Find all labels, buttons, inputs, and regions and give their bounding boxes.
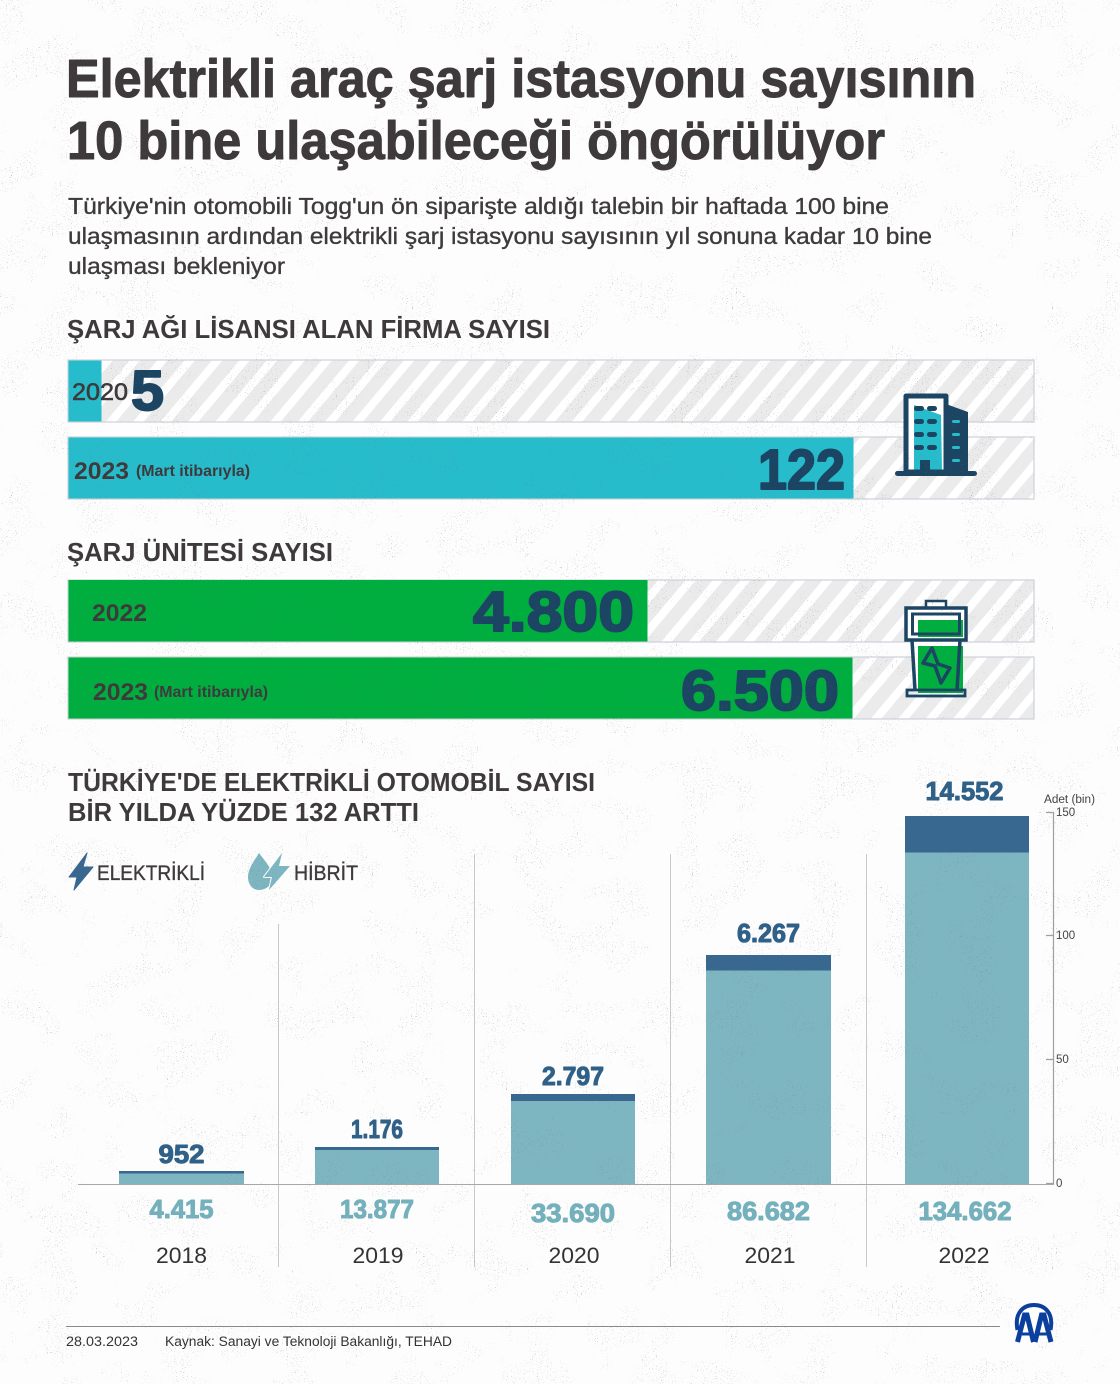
- 2020 column: 2.797: [542, 1061, 604, 1091]
- 2020 column: [511, 1061, 635, 1268]
- bar: 2023 licences: (Mart itibarıyla): [136, 463, 250, 480]
- title: [66, 49, 976, 171]
- 2022 column: 2022: [938, 1243, 990, 1268]
- title: Elektrikli araç şarj istasyonu sayısının: [66, 49, 976, 109]
- axis: [1044, 794, 1095, 1190]
- icon: charging station: [906, 601, 966, 696]
- bar: 2023 units: [68, 657, 1034, 723]
- source line: 28.03.2023: [66, 1334, 138, 1349]
- 2021 column: [706, 918, 831, 1268]
- bar: 2020 licences: 5: [131, 359, 164, 423]
- 2019 column: [315, 1114, 439, 1268]
- bar chart: [78, 776, 1095, 1268]
- column dividers: [278, 854, 866, 1267]
- 2020 column: 2020: [548, 1243, 600, 1268]
- 2022 column: 134.662: [918, 1196, 1012, 1226]
- 2018 column: 2018: [156, 1243, 207, 1268]
- axis: 50: [1056, 1054, 1069, 1066]
- 2019 column: 2019: [352, 1243, 404, 1268]
- 2022 column: 14.552: [926, 776, 1004, 806]
- 2020 column: 33.690: [531, 1198, 615, 1228]
- bar: 2023 units: 6.500: [681, 659, 839, 723]
- 2018 column: [119, 1139, 244, 1268]
- intro text: [68, 193, 932, 279]
- title: 10 bine ulaşabileceği öngörülüyor: [67, 111, 885, 171]
- bar: 2023 licences: 2023: [74, 458, 129, 485]
- 2021 column: 2021: [744, 1243, 796, 1268]
- legend label: hybrid: HİBRİT: [294, 862, 358, 885]
- legend: [69, 853, 358, 890]
- bar: 2023 units: 2023: [93, 679, 148, 706]
- icon: electric: [69, 853, 93, 890]
- bar: 2023 licences: [68, 437, 1034, 502]
- 2018 column: 4.415: [150, 1194, 214, 1224]
- bar: 2022 units: 4.800: [473, 580, 634, 644]
- panel: licence bars: [68, 359, 1034, 502]
- axis: 0: [1056, 1178, 1062, 1190]
- heading: EV count: BİR YILDA YÜZDE 132 ARTTI: [68, 797, 419, 827]
- panel: charging unit bars: [68, 580, 1034, 723]
- heading: licence count: ŞARJ AĞI LİSANSI ALAN FİRMA SAYISI: [67, 314, 550, 344]
- 2019 column: 13.877: [340, 1194, 414, 1224]
- 2021 column: 6.267: [737, 918, 800, 948]
- axis: 100: [1056, 930, 1075, 942]
- bar: 2020 licences: [68, 359, 1034, 423]
- logo: AA: [1017, 1305, 1051, 1342]
- bar: 2022 units: 2022: [92, 600, 147, 627]
- axis: 150: [1056, 807, 1075, 819]
- legend label: electric: ELEKTRİKLİ: [97, 862, 205, 885]
- bar: 2022 units: [68, 580, 1034, 644]
- intro text: ulaşmasının ardından elektrikli şarj istasyonu sayısının yıl sonuna kadar 10 bine: [68, 223, 932, 249]
- icon: hybrid: [248, 853, 290, 890]
- heading: EV count: [68, 767, 595, 827]
- bar: 2023 units: (Mart itibarıyla): [154, 684, 268, 701]
- heading: charging units: ŞARJ ÜNİTESİ SAYISI: [67, 537, 333, 567]
- icon: building: [895, 396, 977, 476]
- intro text: Türkiye'nin otomobili Togg'un ön siparişte aldığı talebin bir haftada 100 bine: [68, 193, 889, 219]
- 2022 column: [905, 776, 1029, 1268]
- heading: EV count: TÜRKİYE'DE ELEKTRİKLİ OTOMOBİL SAYISI: [68, 767, 595, 797]
- 2021 column: 86.682: [727, 1196, 810, 1226]
- axis: Adet (bin): [1044, 794, 1095, 806]
- bar: 2023 licences: 122: [758, 438, 845, 502]
- source line: Kaynak: Sanayi ve Teknoloji Bakanlığı, TEHAD: [165, 1334, 452, 1349]
- 2018 column: 952: [158, 1139, 204, 1169]
- bar: 2020 licences: 2020: [72, 379, 128, 406]
- 2019 column: 1.176: [351, 1114, 403, 1144]
- intro text: ulaşması bekleniyor: [68, 253, 285, 279]
